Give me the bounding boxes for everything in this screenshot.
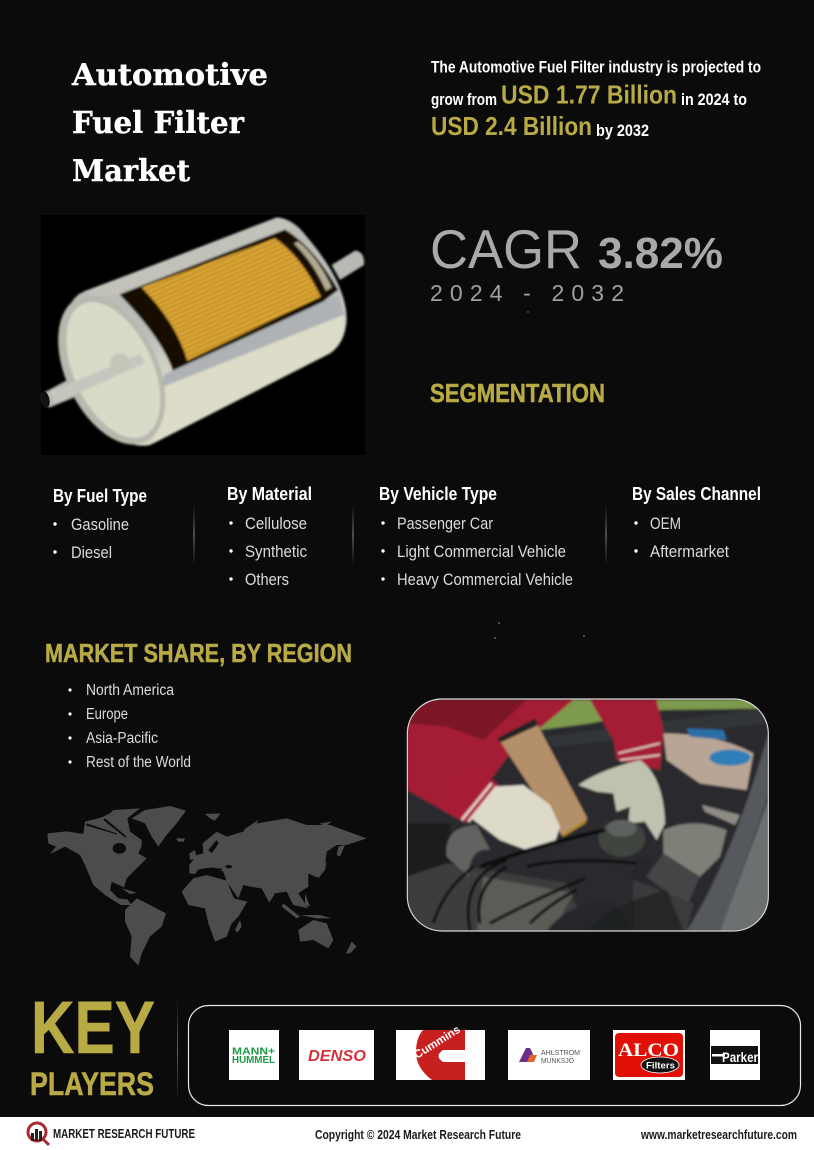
region list: North America — [86, 682, 174, 699]
segment: by vehicle type — [379, 484, 573, 589]
market forecast text: in 2024 to — [681, 91, 747, 109]
segment: by material — [227, 484, 312, 589]
segment: by sales channel: OEM — [650, 514, 681, 533]
segment: by fuel type — [53, 486, 147, 562]
CAGR: CAGR — [430, 218, 582, 280]
market forecast text: The Automotive Fuel Filter industry is projected to — [431, 58, 761, 76]
segment: by fuel type: Diesel — [71, 543, 112, 562]
segment: by material: By Material — [227, 484, 312, 504]
segment: by material: Others — [245, 570, 289, 589]
segment: by sales channel: By Sales Channel — [632, 484, 761, 504]
CAGR: 3.82% — [598, 229, 723, 278]
region list: Europe — [86, 706, 128, 723]
logo: Mann+Hummel: MANN+ — [232, 1046, 275, 1058]
photo: mechanic replacing fuel filter — [406, 698, 769, 932]
heading: segmentation: SEGMENTATION — [430, 378, 605, 408]
logo: Cummins — [396, 1024, 485, 1080]
logo: Denso — [299, 1030, 374, 1080]
region list — [68, 682, 191, 771]
logo: Alco Filters — [613, 1030, 685, 1080]
logo: Denso: DENSO — [308, 1048, 367, 1065]
logo: Ahlstrom Munksjo: AHLSTROM — [541, 1048, 580, 1057]
market forecast text — [431, 58, 761, 141]
segment: by vehicle type: By Vehicle Type — [379, 484, 497, 504]
segment: by vehicle type: Passenger Car — [397, 514, 493, 533]
key players heading: PLAYERS — [30, 1066, 154, 1102]
CAGR: 2024 - 2032 — [430, 280, 624, 306]
CAGR — [430, 218, 723, 306]
logo: Cummins: Cummins — [412, 1024, 463, 1062]
heading: market share by region: MARKET SHARE, BY REGION — [45, 638, 352, 668]
logo: Mann+Hummel: HUMMEL — [232, 1055, 275, 1066]
segment: by fuel type: By Fuel Type — [53, 486, 147, 506]
logo: Ahlstrom Munksjo — [508, 1030, 590, 1080]
market forecast text: USD 2.4 Billion — [431, 111, 592, 141]
logo: Alco Filters: ALCO — [618, 1040, 679, 1061]
market forecast text: grow from — [431, 91, 497, 109]
footer logo: MARKET RESEARCH FUTURE — [53, 1127, 195, 1141]
title: Automotive — [71, 58, 268, 93]
logo: Alco Filters: Filters — [646, 1060, 675, 1070]
logo: Mann+Hummel — [229, 1030, 279, 1080]
key players heading: KEY — [31, 986, 155, 1069]
segment: by material: Synthetic — [245, 542, 307, 561]
footer — [0, 1117, 814, 1150]
title: Fuel Filter — [72, 106, 245, 141]
copyright: Copyright © 2024 Market Research Future — [315, 1128, 521, 1142]
region list: Rest of the World — [86, 754, 191, 771]
title: Market — [72, 154, 190, 189]
segment: by sales channel — [632, 484, 761, 561]
key players panel — [188, 1006, 800, 1106]
logo: Ahlstrom Munksjo: MUNKSJÖ — [541, 1056, 574, 1065]
region list: Asia-Pacific — [86, 730, 158, 747]
segment: by material: Cellulose — [245, 514, 307, 533]
segment: by vehicle type: Light Commercial Vehicle — [397, 542, 566, 561]
image: fuel filter — [36, 215, 365, 461]
market forecast text: by 2032 — [596, 122, 649, 140]
logo: Parker: Parker — [722, 1049, 758, 1065]
segment: by fuel type: Gasoline — [71, 515, 129, 534]
segment: by vehicle type: Heavy Commercial Vehicle — [397, 570, 573, 589]
key players heading — [30, 986, 155, 1102]
segment: by sales channel: Aftermarket — [650, 542, 729, 561]
market forecast text: USD 1.77 Billion — [501, 80, 677, 110]
title — [71, 58, 268, 189]
footer logo — [28, 1123, 195, 1145]
world map — [47, 806, 366, 966]
logo: Parker — [710, 1030, 760, 1080]
